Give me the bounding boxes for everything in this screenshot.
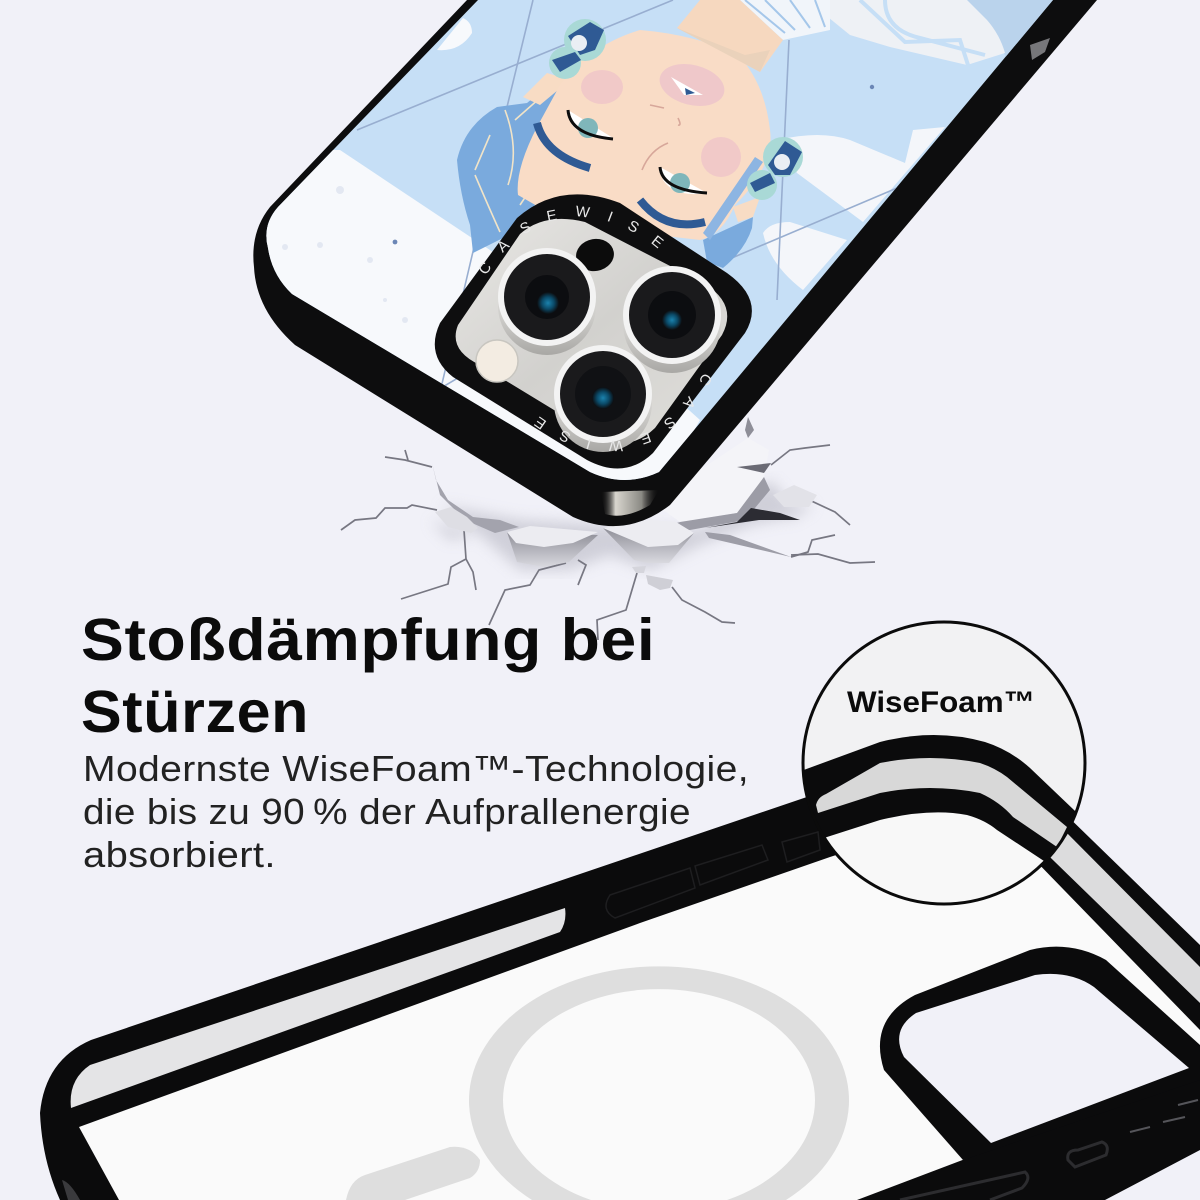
title: Stürzen xyxy=(81,679,309,745)
frame xyxy=(40,744,1200,1200)
top right dark area xyxy=(968,0,1053,56)
magnified frame xyxy=(804,735,1075,861)
ears xyxy=(523,73,760,222)
left slab edge xyxy=(432,463,519,533)
snow patch xyxy=(437,18,472,50)
line art xyxy=(357,0,897,388)
clear interior xyxy=(79,815,1200,1200)
title xyxy=(81,607,655,745)
side buttons xyxy=(606,832,820,918)
ring guide path top xyxy=(486,217,680,276)
snow area xyxy=(250,150,700,490)
cracked wall impact xyxy=(341,417,875,640)
collar xyxy=(740,0,830,40)
chunk B top xyxy=(507,526,598,547)
cracks xyxy=(341,445,875,640)
earring right xyxy=(747,137,803,200)
camera cutout opening xyxy=(899,974,1189,1143)
face xyxy=(518,30,771,240)
clear case, bottom xyxy=(40,744,1200,1200)
flash xyxy=(476,340,518,382)
camera ring brand top: CASEWISE xyxy=(480,206,664,274)
lower wedge xyxy=(705,532,791,557)
camera island xyxy=(434,194,752,468)
chunk C side xyxy=(603,528,694,563)
callout label: WiseFoam™ xyxy=(847,686,1035,719)
right slab edge xyxy=(660,477,770,530)
lens: upper left xyxy=(498,251,596,355)
neck xyxy=(677,0,783,72)
case body xyxy=(253,0,1097,526)
chunk C top xyxy=(603,520,694,547)
body text: die bis zu 90 % der Aufprallenergie xyxy=(83,791,691,832)
side button gloss xyxy=(1030,38,1050,60)
left side hole xyxy=(62,1180,80,1200)
camera plate xyxy=(456,219,727,443)
callout: WiseFoam magnifier xyxy=(802,620,1086,906)
magnified interior xyxy=(826,812,1044,902)
top spike xyxy=(745,417,754,438)
dark triangle xyxy=(737,463,771,473)
phone with case, top xyxy=(253,0,1097,526)
snow blob 1 xyxy=(778,127,945,222)
magsafe ring xyxy=(469,966,849,1200)
lower right gloss xyxy=(1130,1100,1198,1132)
hair right xyxy=(703,217,753,268)
brows xyxy=(537,123,705,224)
dots xyxy=(393,85,874,244)
eye right xyxy=(660,167,707,194)
magnifier outline xyxy=(803,622,1085,904)
title: Stoßdämpfung bei xyxy=(81,607,655,673)
hair strands xyxy=(475,60,583,232)
dark gap xyxy=(705,508,800,528)
silver strip left xyxy=(71,908,565,1108)
right slab xyxy=(650,438,769,522)
chunk B side xyxy=(507,532,598,567)
silver strip right xyxy=(1018,826,1200,1003)
lens: bottom xyxy=(554,348,652,452)
camera cutout frame xyxy=(880,947,1200,1160)
lidar hole xyxy=(574,236,616,274)
ring guide path bottom xyxy=(505,372,704,441)
bottom rail buttons xyxy=(900,1142,1107,1200)
snow blob 2 xyxy=(763,222,847,290)
magsafe alignment pill xyxy=(346,1147,480,1200)
veins xyxy=(860,0,985,65)
lens: right xyxy=(623,269,721,373)
camera ring brand bottom: CASEWISE xyxy=(534,374,711,452)
body text: absorbiert. xyxy=(83,834,276,875)
body text xyxy=(83,748,749,875)
chunk E xyxy=(773,485,817,507)
magnified strip xyxy=(816,758,1067,847)
top right texture xyxy=(830,0,1005,65)
chunk D2 xyxy=(632,566,646,573)
screen artwork xyxy=(266,0,1053,480)
eye left xyxy=(568,110,613,139)
strand right xyxy=(703,157,763,240)
nose xyxy=(642,105,680,170)
cheeks xyxy=(581,70,741,177)
chunk D xyxy=(646,575,673,590)
body text: Modernste WiseFoam™-Technologie, xyxy=(83,748,749,789)
closed eye xyxy=(660,64,724,106)
hair left xyxy=(457,57,590,253)
earring left xyxy=(549,19,606,79)
magnifier fill xyxy=(803,622,1085,904)
case gloss xyxy=(601,490,659,516)
neck shadow xyxy=(677,28,770,72)
chunk A xyxy=(435,507,478,533)
impact shadow xyxy=(430,480,815,570)
